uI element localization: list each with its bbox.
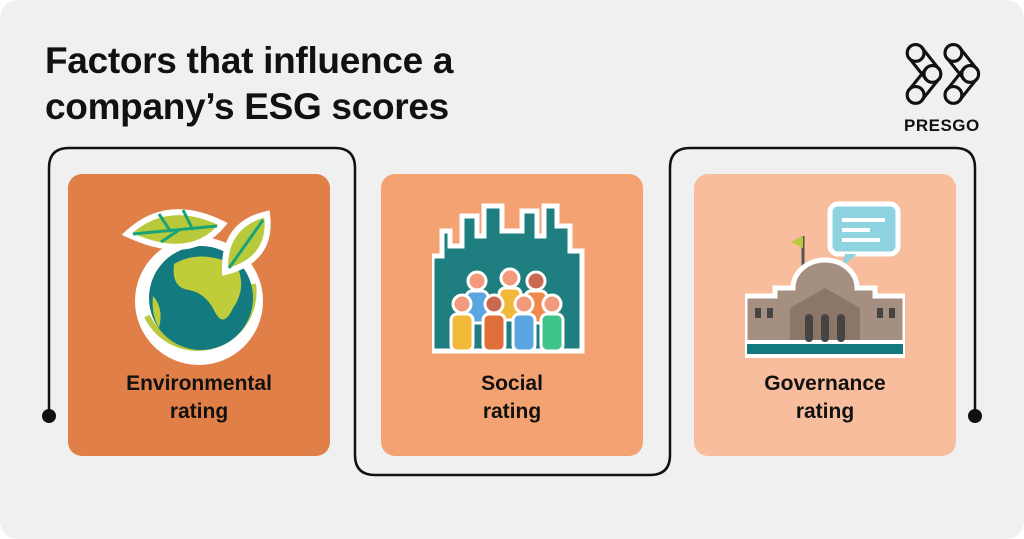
panel: social (381, 174, 643, 456)
icon: globe with leaves (122, 209, 271, 365)
logo (904, 43, 980, 135)
label: Governance (764, 372, 886, 395)
label (764, 372, 886, 423)
label: Environmental (126, 372, 272, 395)
panel: governance (694, 174, 956, 456)
title: company’s ESG scores (45, 86, 449, 127)
logo: PRESGO (904, 116, 980, 135)
title: Factors that influence a (45, 40, 453, 81)
label: rating (483, 400, 541, 423)
icon: government building (745, 202, 905, 358)
label (481, 372, 543, 423)
label: Social (481, 372, 543, 395)
icon: people and city (432, 204, 584, 354)
label: rating (170, 400, 228, 423)
panel: environmental (68, 174, 330, 456)
label: rating (796, 400, 854, 423)
title (45, 40, 454, 127)
label (126, 372, 272, 423)
